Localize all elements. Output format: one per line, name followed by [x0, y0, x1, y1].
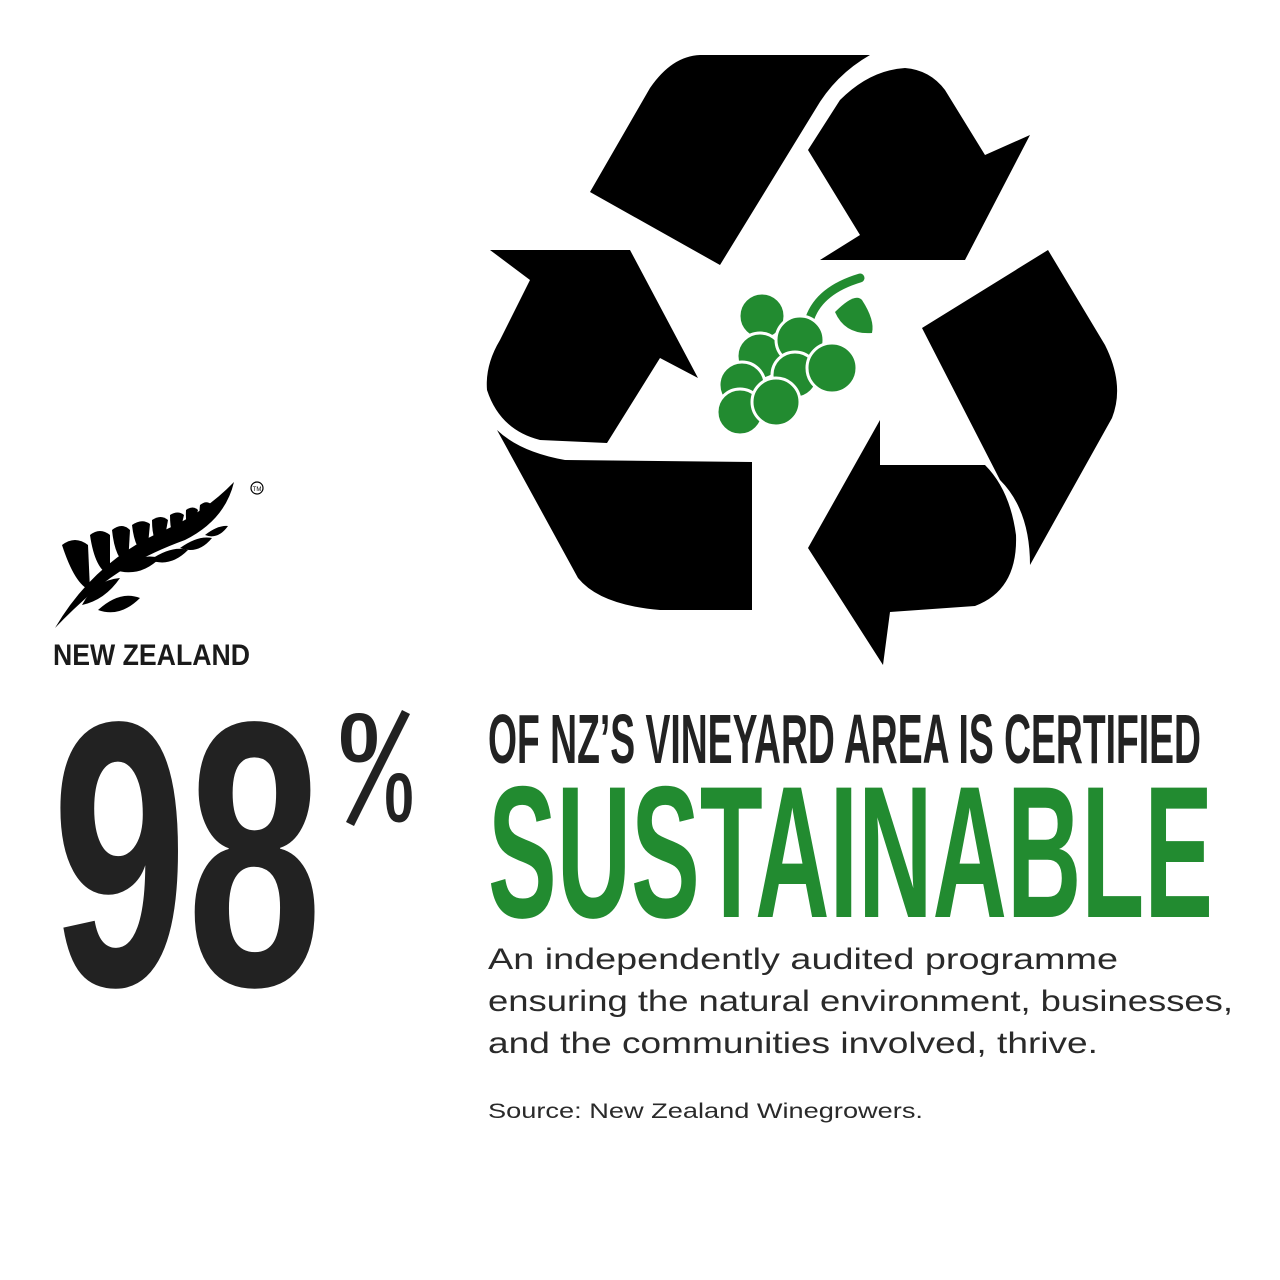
icon: recycle symbol	[487, 55, 1117, 665]
big number 98%: 98	[52, 644, 322, 1066]
body text	[488, 943, 1233, 1060]
body text: ensuring the natural environment, businesses,	[488, 985, 1233, 1018]
body text: and the communities involved, thrive.	[488, 1027, 1098, 1060]
logo: silver fern New Zealand: TM	[253, 487, 261, 493]
body text: An independently audited programme	[488, 943, 1118, 976]
logo: silver fern New Zealand	[53, 482, 263, 672]
logo text: NEW ZEALAND	[53, 639, 250, 672]
trademark	[251, 482, 263, 494]
icon: grapes	[717, 278, 873, 435]
big number 98%: 0	[338, 699, 380, 777]
source: Source: New Zealand Winegrowers.	[488, 1100, 923, 1123]
big number 98%: 0	[384, 759, 414, 837]
icon: fern	[55, 482, 234, 628]
